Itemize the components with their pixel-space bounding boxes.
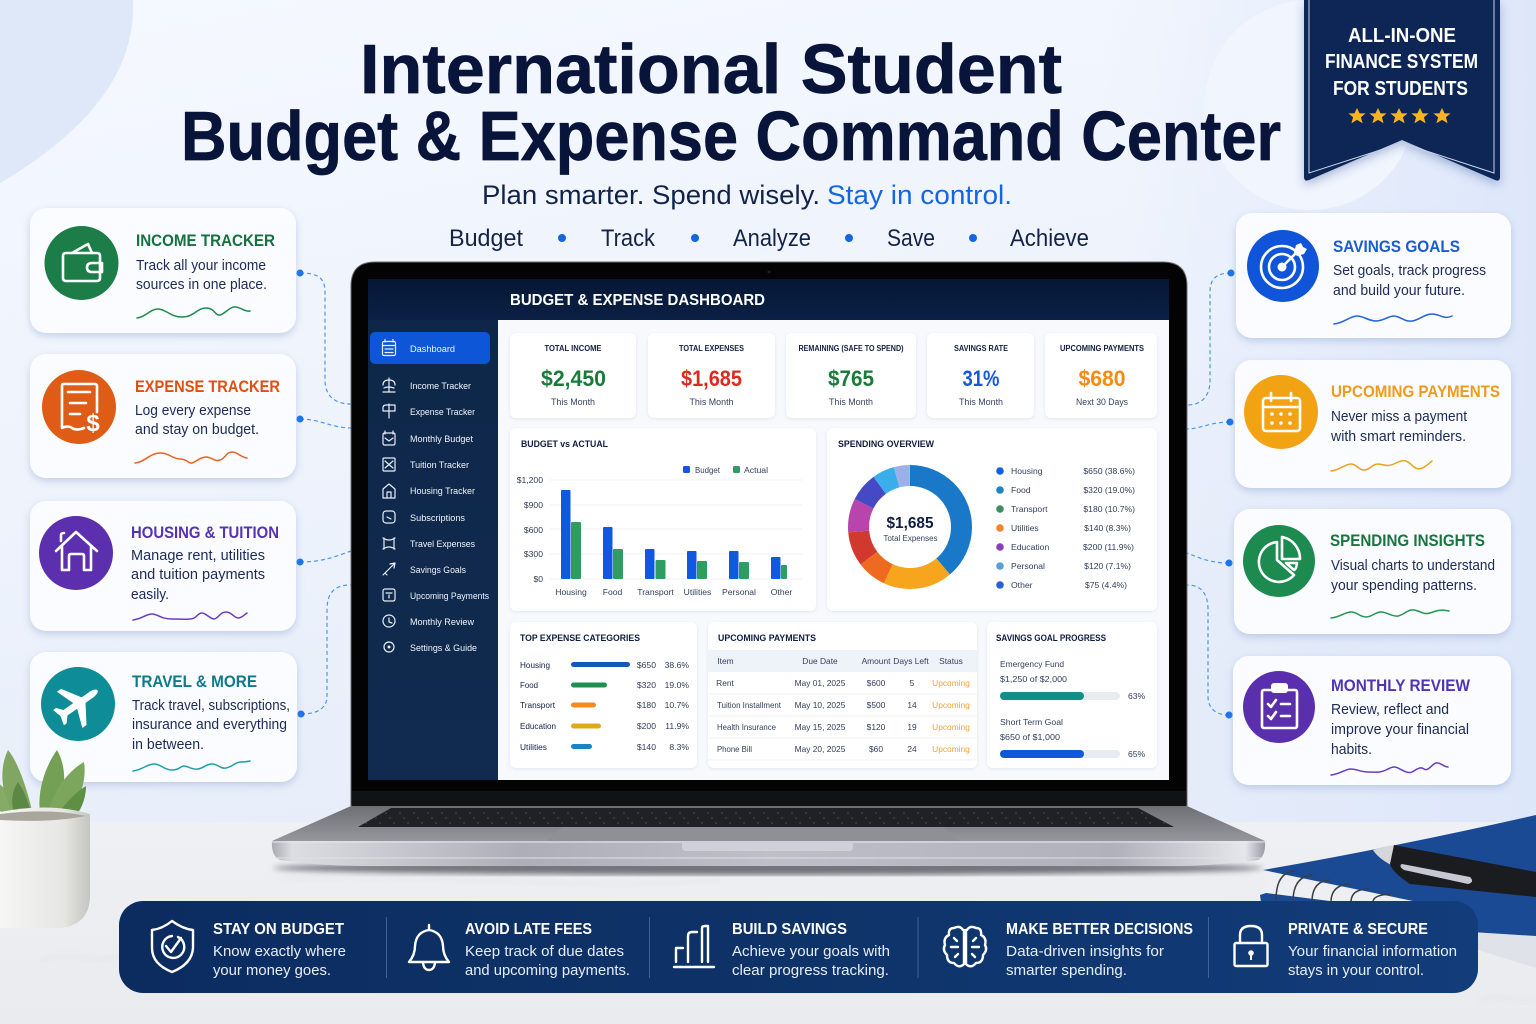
kpi: total expenses bbox=[648, 333, 775, 418]
panel: savings goals: SAVINGS GOALS bbox=[1333, 237, 1460, 256]
panel: upcoming payments table: UPCOMING PAYMENTS bbox=[718, 632, 816, 643]
benefit: private and secure: Your financial information bbox=[1288, 944, 1457, 960]
donut chart bbox=[858, 476, 962, 578]
panel: travel and more bbox=[30, 652, 297, 782]
category rows: $180 bbox=[637, 700, 656, 710]
donut chart: $1,685 bbox=[886, 515, 934, 532]
benefit: better decisions: smarter spending. bbox=[1006, 963, 1127, 979]
laptop base bbox=[272, 806, 1265, 875]
kpi: upcoming payments: $680 bbox=[1078, 366, 1126, 391]
icon: airplane bbox=[41, 667, 115, 741]
table rows: Upcoming bbox=[932, 722, 970, 732]
panel: housing and tuition: HOUSING & TUITION bbox=[131, 523, 279, 542]
bar chart: $300 bbox=[524, 549, 543, 559]
panel: monthly review: Review, reflect and bbox=[1331, 702, 1449, 718]
icon: shield bbox=[152, 921, 193, 972]
panel: spending insights: your spending patterns. bbox=[1331, 578, 1477, 594]
laptop deck bbox=[272, 806, 1265, 841]
title: International Student bbox=[360, 30, 1062, 108]
category rows: 38.6% bbox=[665, 660, 689, 670]
nav words row bbox=[449, 225, 1089, 252]
bar chart: $1,200 bbox=[517, 475, 543, 485]
category rows: Housing bbox=[520, 660, 550, 670]
benefit: private and secure bbox=[1234, 921, 1457, 979]
kpi: upcoming payments bbox=[1045, 333, 1157, 418]
table rows: $60 bbox=[869, 744, 883, 754]
icon: receipt bbox=[42, 370, 116, 444]
panel: travel and more: in between. bbox=[132, 737, 204, 753]
progress: emergency fund: $1,250 of $2,000 bbox=[1000, 674, 1067, 684]
kpi: total income bbox=[510, 333, 636, 418]
donut legend: $120 (7.1%) bbox=[1084, 561, 1131, 571]
menu item: subscriptions: Subscriptions bbox=[410, 513, 465, 524]
benefit: stay on budget: STAY ON BUDGET bbox=[213, 921, 344, 938]
pot bbox=[0, 807, 90, 928]
table header: Item bbox=[717, 656, 734, 666]
donut legend: Food bbox=[1011, 485, 1031, 495]
table rows: Rent bbox=[716, 678, 735, 688]
panel: upcoming payments bbox=[1235, 360, 1511, 488]
benefit: better decisions: MAKE BETTER DECISIONS bbox=[1006, 921, 1193, 938]
plant leaves bbox=[0, 750, 86, 828]
panel: monthly review: MONTHLY REVIEW bbox=[1331, 676, 1471, 695]
category rows: $200 bbox=[637, 721, 656, 731]
menu item: savings goals: Savings Goals bbox=[410, 565, 466, 576]
bar chart: Food bbox=[603, 587, 623, 597]
donut legend: $140 (8.3%) bbox=[1084, 523, 1131, 533]
kpi: total income: This Month bbox=[551, 397, 595, 407]
category rows: 8.3% bbox=[669, 742, 689, 752]
category rows: Utilities bbox=[520, 742, 547, 752]
nav words row: Track bbox=[601, 225, 656, 252]
kpi: savings rate: SAVINGS RATE bbox=[954, 344, 1009, 353]
donut legend bbox=[996, 466, 1135, 590]
kpi: upcoming payments: Next 30 Days bbox=[1076, 397, 1128, 407]
table rows: $500 bbox=[867, 700, 886, 710]
category rows: 11.9% bbox=[665, 721, 689, 731]
notebook and pen bbox=[1260, 815, 1536, 968]
kpi: total expenses: $1,685 bbox=[681, 366, 742, 391]
ribbon badge: FOR STUDENTS bbox=[1333, 78, 1468, 100]
panel: savings goals bbox=[1236, 213, 1511, 338]
menu item: upcoming payments: Upcoming Payments bbox=[410, 591, 489, 602]
background blob: top right bbox=[1205, 0, 1415, 210]
donut legend: Utilities bbox=[1011, 523, 1039, 533]
menu item: travel expenses: Travel Expenses bbox=[410, 539, 475, 550]
table rows: 19 bbox=[907, 722, 917, 732]
icon: receipt: $ bbox=[86, 410, 100, 437]
panel: housing and tuition: easily. bbox=[131, 587, 169, 603]
subtitle: Stay in control. bbox=[827, 180, 1012, 210]
panel: housing and tuition: and tuition payments bbox=[131, 567, 265, 583]
progress: short term goal bbox=[1000, 717, 1146, 759]
panel: savings goal progress bbox=[987, 622, 1157, 768]
bar chart: $0 bbox=[533, 574, 543, 584]
panel: savings goals: and build your future. bbox=[1333, 283, 1465, 299]
icon: house bbox=[39, 516, 113, 590]
benefit: stay on budget: Know exactly where bbox=[213, 944, 346, 960]
donut legend: Education bbox=[1011, 542, 1049, 552]
table rows: Upcoming bbox=[932, 700, 970, 710]
dashboard header: BUDGET & EXPENSE DASHBOARD bbox=[510, 292, 765, 309]
ribbon badge: FINANCE SYSTEM bbox=[1325, 51, 1478, 73]
panel: monthly review: improve your financial bbox=[1331, 722, 1469, 738]
donut legend: Personal bbox=[1011, 561, 1045, 571]
dashboard main background bbox=[498, 320, 1169, 780]
ribbon badge bbox=[1304, 0, 1500, 181]
active menu item bbox=[370, 332, 490, 364]
bottom benefits bar bbox=[119, 901, 1478, 993]
panel: income tracker: INCOME TRACKER bbox=[136, 231, 275, 250]
menu item: income tracker: Income Tracker bbox=[410, 381, 472, 392]
panel: income tracker: sources in one place. bbox=[136, 277, 267, 293]
progress: emergency fund: Emergency Fund bbox=[1000, 659, 1064, 669]
dashboard header bbox=[368, 279, 1169, 320]
table rows: 24 bbox=[907, 744, 917, 754]
donut legend: Transport bbox=[1011, 504, 1048, 514]
donut legend: $200 (11.9%) bbox=[1083, 542, 1134, 552]
panel: housing and tuition: Manage rent, utilities bbox=[131, 548, 265, 564]
trackpad bbox=[546, 827, 960, 841]
menu item: subscriptions bbox=[383, 511, 465, 524]
icon: bars bbox=[674, 926, 714, 967]
laptop lid bbox=[351, 262, 1187, 806]
kpi: remaining bbox=[786, 333, 916, 418]
panel: expense tracker: EXPENSE TRACKER bbox=[135, 377, 280, 396]
keyboard bbox=[358, 808, 1174, 827]
kpi: savings rate: This Month bbox=[959, 397, 1003, 407]
benefit: build savings: BUILD SAVINGS bbox=[732, 921, 847, 938]
table rows: Phone Bill bbox=[717, 744, 752, 754]
kpi: upcoming payments: UPCOMING PAYMENTS bbox=[1060, 344, 1145, 353]
sidebar bbox=[368, 320, 498, 780]
nav words row: Save bbox=[887, 225, 935, 252]
menu item: settings and guide: Settings & Guide bbox=[410, 643, 477, 654]
panel: top expense categories: TOP EXPENSE CATEGORIES bbox=[520, 632, 640, 643]
menu item: savings goals bbox=[383, 563, 466, 576]
menu item: housing tracker: Housing Tracker bbox=[410, 486, 476, 497]
title bbox=[181, 30, 1281, 175]
bar chart: Other bbox=[771, 587, 792, 597]
nav words row: Budget bbox=[449, 225, 523, 252]
benefit: better decisions: Data-driven insights for bbox=[1006, 944, 1164, 960]
plant and pot bbox=[0, 750, 90, 928]
donut chart: Total Expenses bbox=[884, 533, 938, 543]
progress: emergency fund: 63% bbox=[1128, 691, 1146, 701]
panel: savings goal progress: SAVINGS GOAL PROGRESS bbox=[996, 632, 1106, 643]
menu item: monthly review: Monthly Review bbox=[410, 617, 474, 628]
category rows: 10.7% bbox=[665, 700, 689, 710]
menu item: tuition tracker bbox=[383, 458, 470, 471]
menu item: monthly budget: Monthly Budget bbox=[410, 434, 473, 445]
icon: lock bbox=[1234, 926, 1268, 966]
kpi: total income: TOTAL INCOME bbox=[544, 344, 602, 353]
progress: emergency fund bbox=[1000, 659, 1146, 701]
benefit: build savings: Achieve your goals with bbox=[732, 944, 890, 960]
category rows: 19.0% bbox=[665, 680, 689, 690]
panel: monthly review: habits. bbox=[1331, 742, 1372, 758]
progress: short term goal: Short Term Goal bbox=[1000, 717, 1063, 727]
panel: upcoming payments: with smart reminders. bbox=[1330, 429, 1466, 445]
nav words row: Achieve bbox=[1010, 225, 1089, 252]
kpi: remaining: REMAINING (SAFE TO SPEND) bbox=[798, 344, 904, 353]
category rows: $320 bbox=[637, 680, 656, 690]
panel: spending insights bbox=[1234, 509, 1511, 634]
table rows: Upcoming bbox=[932, 744, 970, 754]
progress: short term goal: 65% bbox=[1128, 749, 1146, 759]
benefit: private and secure: PRIVATE & SECURE bbox=[1288, 921, 1428, 938]
category rows bbox=[520, 660, 689, 752]
panel: upcoming payments: Never miss a payment bbox=[1331, 409, 1467, 425]
nav words row: Analyze bbox=[733, 225, 811, 252]
table rows: May 15, 2025 bbox=[795, 722, 846, 732]
category rows: Food bbox=[520, 680, 538, 690]
table rows: 14 bbox=[907, 700, 917, 710]
panel: upcoming payments table bbox=[708, 622, 977, 768]
chart legend bbox=[683, 465, 768, 475]
kpi: savings rate bbox=[927, 333, 1034, 418]
bar chart: $900 bbox=[524, 500, 543, 510]
icon: pie chart bbox=[1243, 525, 1315, 597]
kpi: remaining: $765 bbox=[828, 366, 874, 391]
panel: travel and more: Track travel, subscriptions, bbox=[132, 698, 290, 714]
panel: budget vs actual: BUDGET vs ACTUAL bbox=[521, 438, 608, 449]
menu item: tuition tracker: Tuition Tracker bbox=[410, 460, 470, 471]
table header: Status bbox=[939, 656, 963, 666]
laptop front lip bbox=[272, 841, 1265, 866]
panel: income tracker bbox=[30, 208, 296, 333]
menu item: settings and guide bbox=[384, 642, 477, 654]
panel: savings goals: Set goals, track progress bbox=[1333, 263, 1486, 279]
notebook pages bbox=[1266, 873, 1405, 901]
icon: wallet bbox=[44, 226, 118, 300]
progress: short term goal: $650 of $1,000 bbox=[1000, 732, 1060, 742]
panel: expense tracker: Log every expense bbox=[135, 403, 251, 419]
notebook cover bbox=[1263, 815, 1536, 936]
benefit: stay on budget: your money goes. bbox=[213, 963, 331, 979]
bar chart: Utilities bbox=[684, 587, 711, 597]
benefit: avoid late fees bbox=[409, 921, 630, 979]
active menu item: Dashboard bbox=[410, 344, 455, 355]
category rows: $650 bbox=[637, 660, 656, 670]
menu item: expense tracker: Expense Tracker bbox=[410, 407, 476, 418]
benefit: avoid late fees: AVOID LATE FEES bbox=[465, 921, 592, 938]
menu item: monthly budget bbox=[383, 431, 473, 445]
menu item: upcoming payments bbox=[383, 589, 489, 602]
icon: clipboard bbox=[1243, 671, 1315, 743]
panel: travel and more: insurance and everything bbox=[132, 717, 287, 733]
benefit: private and secure: stays in your control. bbox=[1288, 963, 1424, 979]
panel: income tracker: Track all your income bbox=[136, 258, 266, 274]
icon: brain bbox=[944, 927, 986, 966]
table header: Days Left bbox=[893, 656, 929, 666]
table rows: Health Insurance bbox=[717, 722, 776, 732]
kpi: total expenses: This Month bbox=[690, 397, 734, 407]
icon: target bbox=[1247, 230, 1319, 302]
menu item: travel expenses bbox=[383, 538, 475, 550]
chart legend: Budget bbox=[695, 465, 721, 475]
panel: spending overview bbox=[827, 428, 1157, 611]
table rows: May 20, 2025 bbox=[795, 744, 846, 754]
spiral rings bbox=[1276, 871, 1390, 902]
table header bbox=[708, 650, 977, 672]
panel: spending overview: SPENDING OVERVIEW bbox=[838, 438, 934, 449]
benefit: stay on budget bbox=[152, 921, 346, 979]
benefit: avoid late fees: Keep track of due dates bbox=[465, 944, 624, 960]
panel: housing and tuition bbox=[30, 501, 296, 631]
table rows: Upcoming bbox=[932, 678, 970, 688]
pen bbox=[1373, 845, 1536, 897]
title: Budget & Expense Command Center bbox=[181, 97, 1281, 175]
bar chart: Housing bbox=[555, 587, 587, 597]
menu item: monthly review bbox=[383, 615, 474, 628]
ribbon badge: ALL-IN-ONE bbox=[1348, 25, 1456, 47]
panel: top expense categories bbox=[510, 622, 697, 768]
benefit: build savings bbox=[674, 921, 890, 979]
laptop notch bbox=[682, 841, 853, 851]
panel: expense tracker bbox=[30, 354, 296, 478]
benefit: better decisions bbox=[944, 921, 1193, 979]
category rows: $140 bbox=[637, 742, 656, 752]
kpi: remaining: This Month bbox=[829, 397, 873, 407]
table rows: Tuition Installment bbox=[717, 700, 782, 710]
kpi: savings rate: 31% bbox=[962, 366, 1000, 391]
donut legend: $180 (10.7%) bbox=[1083, 504, 1135, 514]
donut legend: $320 (19.0%) bbox=[1083, 485, 1135, 495]
icon: calendar bbox=[1244, 375, 1318, 449]
kpi: total income: $2,450 bbox=[541, 366, 606, 391]
background blob: top left bbox=[0, 0, 133, 183]
icon: bell bbox=[409, 925, 449, 970]
bar chart bbox=[517, 475, 802, 597]
menu item: housing tracker bbox=[383, 484, 476, 498]
panel: budget vs actual bbox=[510, 428, 816, 611]
table rows: 5 bbox=[910, 678, 915, 688]
marble table bbox=[0, 822, 1536, 1024]
panel: spending insights: Visual charts to understand bbox=[1331, 558, 1495, 574]
donut legend: $650 (38.6%) bbox=[1083, 466, 1135, 476]
table rows: $120 bbox=[867, 722, 886, 732]
bar chart: Personal bbox=[722, 587, 756, 597]
subtitle bbox=[482, 180, 1012, 210]
table rows: $600 bbox=[867, 678, 886, 688]
bar chart: $600 bbox=[524, 525, 543, 535]
table header: Amount bbox=[862, 656, 891, 666]
donut legend: Housing bbox=[1011, 466, 1043, 476]
table rows: May 10, 2025 bbox=[795, 700, 846, 710]
donut legend: Other bbox=[1011, 580, 1033, 590]
subtitle: Plan smarter. Spend wisely. bbox=[482, 180, 820, 210]
menu item: income tracker bbox=[383, 378, 472, 392]
menu item: expense tracker bbox=[383, 404, 476, 418]
panel: upcoming payments: UPCOMING PAYMENTS bbox=[1331, 382, 1500, 401]
panel: expense tracker: and stay on budget. bbox=[135, 422, 259, 438]
category rows: Education bbox=[520, 721, 556, 731]
bar chart: Transport bbox=[637, 587, 674, 597]
table rows: May 01, 2025 bbox=[795, 678, 846, 688]
donut legend: $75 (4.4%) bbox=[1085, 580, 1127, 590]
table header: Due Date bbox=[802, 656, 838, 666]
kpi: total expenses: TOTAL EXPENSES bbox=[679, 344, 745, 353]
panel: travel and more: TRAVEL & MORE bbox=[132, 672, 257, 691]
benefit: build savings: clear progress tracking. bbox=[732, 963, 889, 979]
category rows: Transport bbox=[520, 700, 556, 710]
panel: spending insights: SPENDING INSIGHTS bbox=[1330, 531, 1485, 550]
table rows bbox=[708, 678, 977, 760]
connector lines bbox=[296, 270, 1234, 718]
panel: monthly review bbox=[1233, 656, 1511, 785]
chart legend: Actual bbox=[744, 465, 768, 475]
benefit: avoid late fees: and upcoming payments. bbox=[465, 963, 630, 979]
